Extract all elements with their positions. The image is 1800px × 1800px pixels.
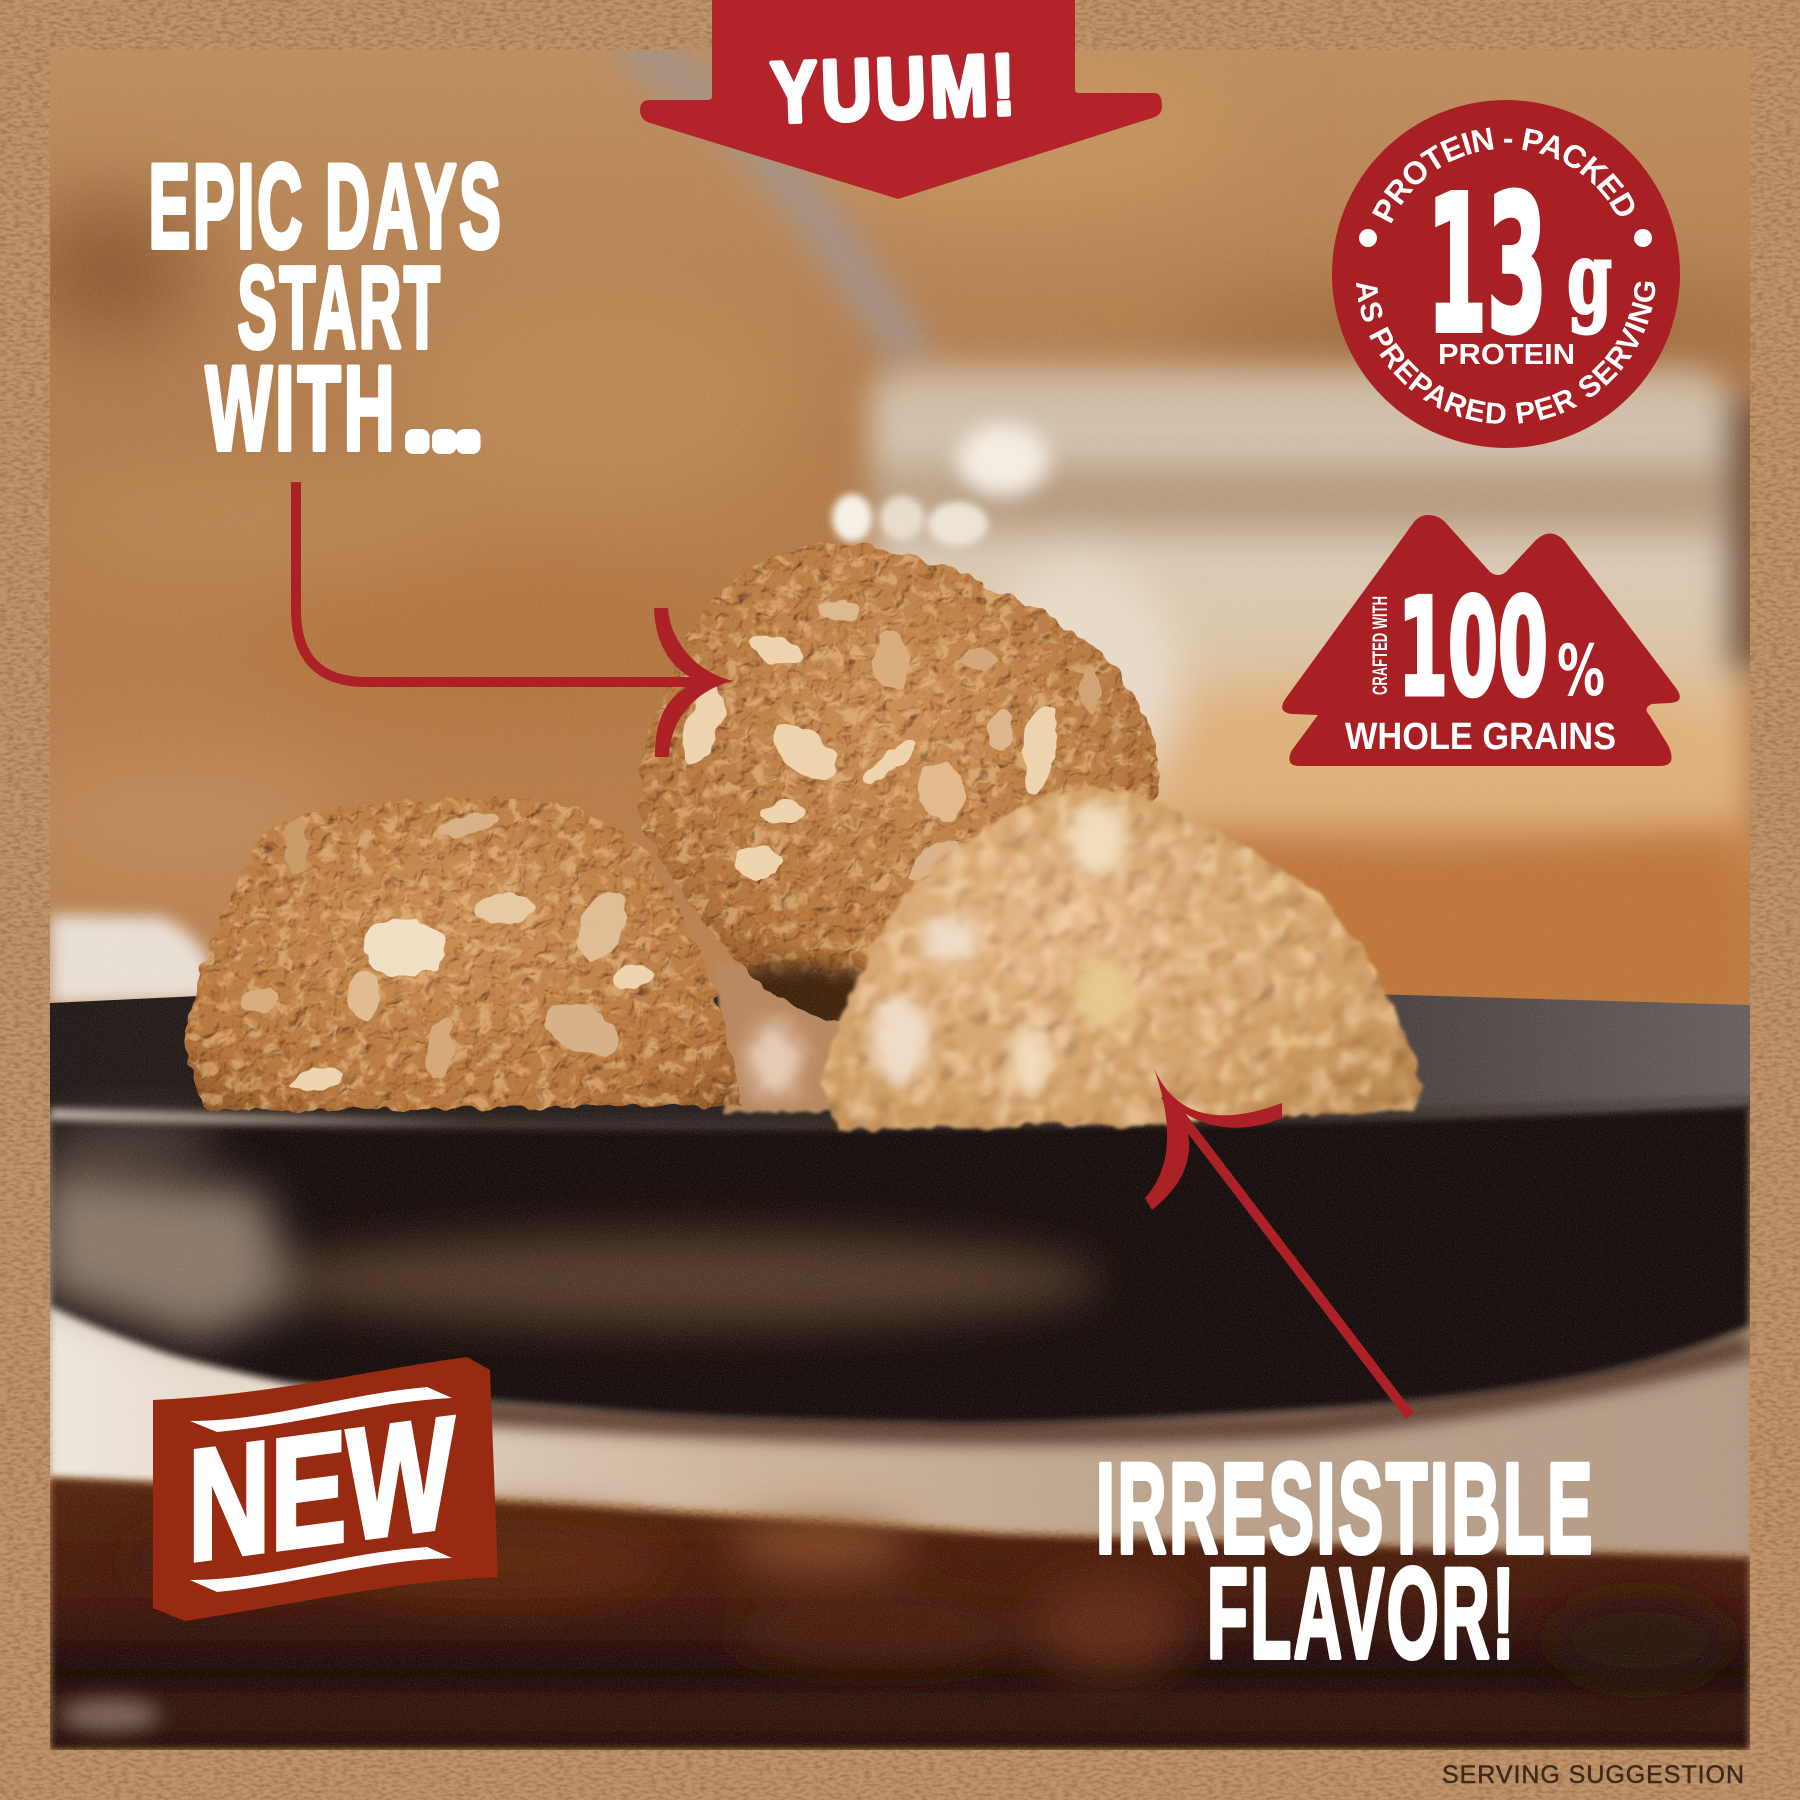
white cloth at the left behind the plate xyxy=(50,915,220,1005)
blurred warm backdrop xyxy=(10,40,1800,1150)
left oat ball xyxy=(170,790,750,1120)
headline: Irresistible flavor!: FLAVOR! xyxy=(1207,1542,1517,1686)
blurred glass jar xyxy=(832,365,1765,1010)
flag: NEW: NEW xyxy=(188,1383,454,1595)
front out-of-focus oat ball xyxy=(810,775,1435,1140)
headline: Epic days start with... xyxy=(148,140,504,476)
crafted with label: CRAFTED WITH xyxy=(1369,596,1392,695)
headline: Epic days start with...: START xyxy=(238,242,442,372)
curved label top: PROTEIN - PACKED xyxy=(1372,128,1634,224)
headline: Epic days start with...: ... xyxy=(409,392,477,459)
swoosh bottom xyxy=(190,1547,452,1592)
badge: 13 g protein: g xyxy=(1567,221,1612,336)
dark wooden board xyxy=(50,1478,1750,1750)
banner label: YUUM! xyxy=(769,37,1021,141)
flag: NEW xyxy=(153,1357,498,1621)
jar highlights xyxy=(957,424,1049,496)
arrow: headline to top oat ball xyxy=(296,482,733,757)
blurred spoon handle xyxy=(625,40,915,360)
badge: crafted with 100% whole grains xyxy=(1282,515,1680,766)
headline: Epic days start with...: WITH xyxy=(206,342,398,476)
oat flakes xyxy=(242,808,656,1094)
banner arrow: YUUM! xyxy=(640,0,1162,199)
plate outer bowl xyxy=(40,1100,1750,1424)
plate inner surface xyxy=(50,992,1750,1126)
top oat ball xyxy=(620,530,1170,1035)
swoosh top xyxy=(190,1387,452,1432)
oat flakes xyxy=(675,600,1099,887)
arrow: irresistible flavor to front ball xyxy=(1145,1068,1410,1416)
shadow below the bowl xyxy=(380,1345,1750,1432)
curved label bottom: AS PREPARED PER SERVING xyxy=(1356,282,1656,424)
headline: Epic days start with...: EPIC DAYS xyxy=(148,140,504,274)
badge: 13 g protein: PROTEIN xyxy=(1438,339,1575,371)
footnote: serving suggestion: SERVING SUGGESTION xyxy=(1442,1761,1744,1789)
headline: Irresistible flavor! xyxy=(1096,1438,1595,1686)
badge: crafted with 100% whole grains: % xyxy=(1557,630,1605,712)
back small oat ball xyxy=(715,960,850,1112)
badge: 13 g protein: 13 xyxy=(1427,156,1547,375)
figure 100%: 100 xyxy=(1398,570,1548,726)
badge: crafted with 100% whole grains: WHOLE GRAINS xyxy=(1345,716,1616,758)
cream cloth under the plate xyxy=(50,1230,1750,1555)
badge: 13 g protein xyxy=(1332,100,1680,448)
